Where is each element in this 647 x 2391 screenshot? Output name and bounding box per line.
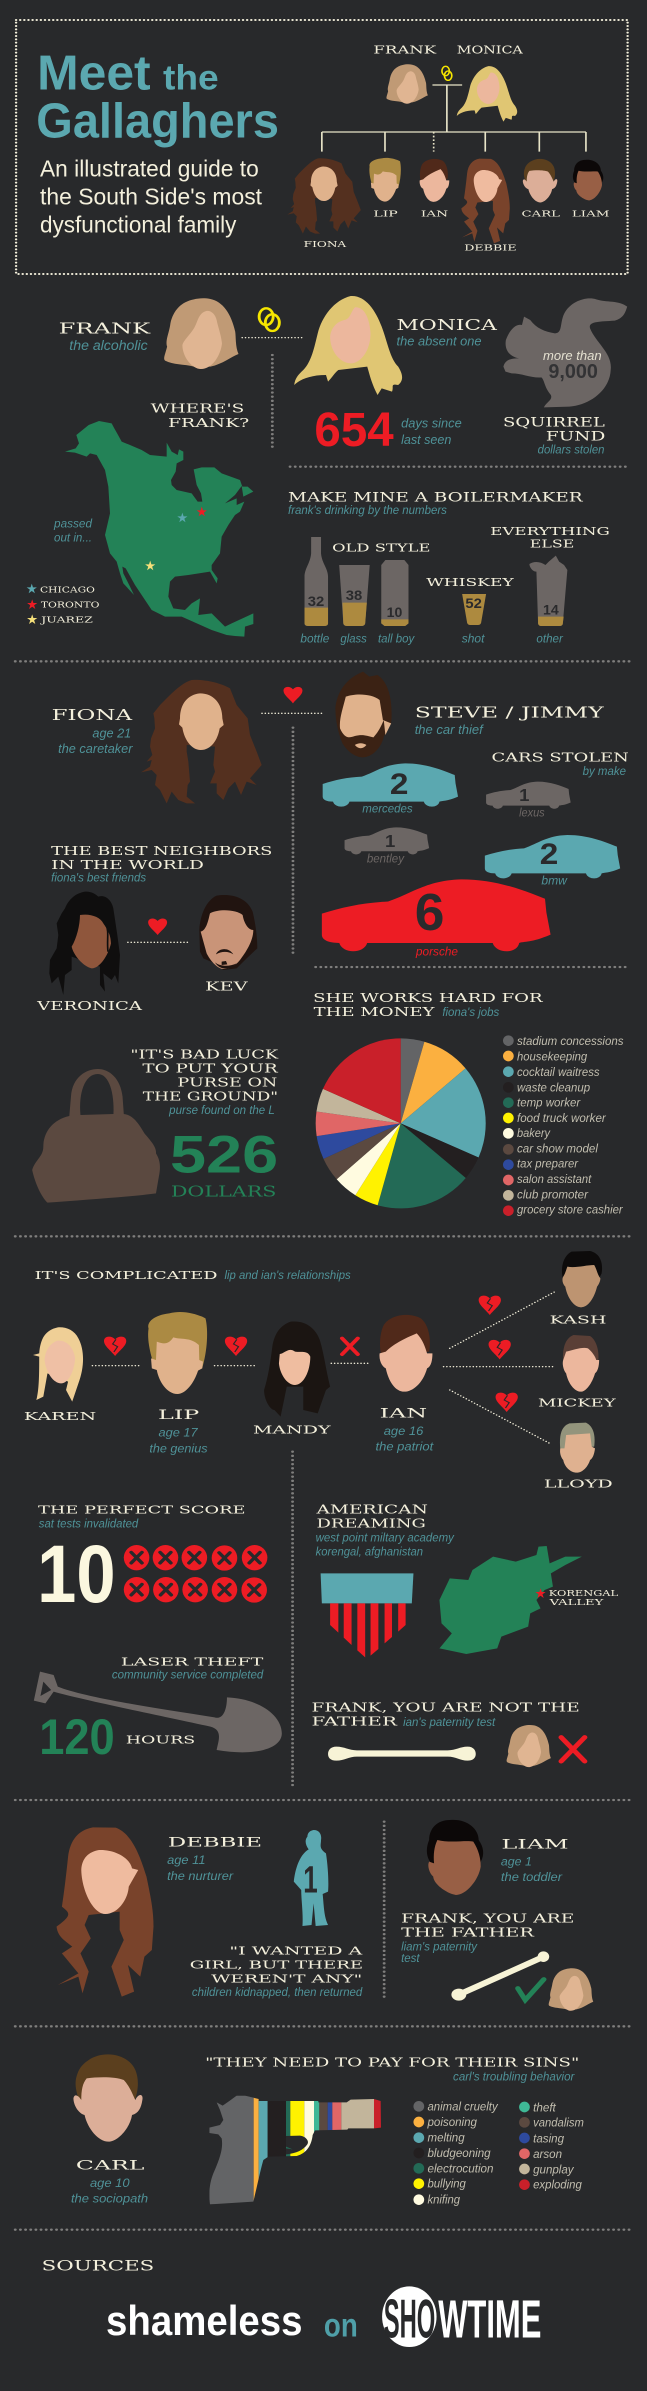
steve heading: the car thief xyxy=(415,722,484,738)
portrait: fiona xyxy=(141,680,262,803)
portrait: frank xyxy=(164,298,239,369)
heading: you are the father: liam's paternity xyxy=(401,1940,478,1953)
heading: boilermaker: frank's drinking by the numbers xyxy=(288,503,447,517)
icon: cocktail xyxy=(529,556,567,626)
heading: you are the father: THE FATHER xyxy=(401,1926,535,1940)
heading: the perfect score xyxy=(38,1504,246,1530)
quote: bad luck xyxy=(130,1048,279,1117)
chart: drinks by the numbers: glass xyxy=(340,632,367,645)
chart: drinks by the numbers: shot xyxy=(462,632,486,645)
pie legend: tax preparer xyxy=(517,1157,579,1170)
portrait: ian: the patriot xyxy=(375,1440,435,1453)
car: bentley: 1 xyxy=(385,832,395,851)
pie legend: food truck worker xyxy=(517,1111,606,1125)
icon: red x xyxy=(342,1338,358,1354)
portrait: lip: LIP xyxy=(158,1407,199,1423)
gun legend: melting xyxy=(427,2131,465,2144)
portrait: veronica xyxy=(36,892,142,1014)
icon: cocktail: 14 xyxy=(543,603,559,618)
icon: shot glass xyxy=(462,594,486,625)
portrait: lloyd xyxy=(544,1423,613,1491)
carl heading: the sociopath xyxy=(71,2192,148,2205)
quote: wanted a girl: "I WANTED A xyxy=(229,1945,363,1958)
family tree: FRANK xyxy=(373,44,437,56)
panel: header xyxy=(16,20,628,274)
car: porsche: porsche xyxy=(415,945,458,958)
icon: shield xyxy=(321,1573,413,1657)
stat: 10 invalidated tests xyxy=(37,1529,267,1620)
logo: shameless on showtime: shameless xyxy=(106,2298,302,2344)
gun legend: electrocution xyxy=(427,2162,494,2175)
heading: where's frank: FRANK? xyxy=(168,416,249,431)
heading: it's complicated xyxy=(35,1268,351,1283)
stat: 120 hours xyxy=(39,1709,195,1765)
monica heading xyxy=(397,317,498,349)
portrait: karen: KAREN xyxy=(24,1410,96,1424)
logo: shameless on showtime: SHO xyxy=(384,2289,435,2350)
pie legend xyxy=(503,1034,624,1216)
heading: you are the father: FRANK, YOU ARE xyxy=(401,1912,574,1926)
chart: drinks by the numbers: EVERYTHING xyxy=(490,525,610,539)
heading: american dreaming: AMERICAN xyxy=(315,1503,428,1517)
quote: bad luck: THE GROUND" xyxy=(143,1090,278,1104)
icon: broken heart xyxy=(104,1337,126,1356)
icon: red x xyxy=(561,1737,585,1761)
logo: shameless on showtime xyxy=(106,2286,541,2350)
icon: tall boy can xyxy=(381,560,409,626)
heading: laser theft xyxy=(112,1656,264,1681)
map caption: passed xyxy=(53,517,92,530)
icon: green check xyxy=(518,1979,544,2000)
liam heading xyxy=(501,1836,569,1884)
title: the xyxy=(163,58,219,97)
portrait: karen xyxy=(24,1327,96,1424)
map caption: out in... xyxy=(54,531,92,544)
car: lexus: 1 xyxy=(519,786,529,805)
pie chart: fiona's jobs xyxy=(316,1038,486,1208)
car: bentley: bentley xyxy=(367,852,405,865)
quote: pay for their sins: carl's troubling behavior xyxy=(453,2070,575,2083)
heading: you are the father: test xyxy=(401,1951,421,1965)
steve heading: STEVE / JIMMY xyxy=(415,704,605,721)
squirrel fund: SQUIRREL xyxy=(503,416,606,430)
icon: shot glass: 52 xyxy=(465,596,482,612)
heading: you are the father xyxy=(401,1912,574,1965)
heading: not the father: FRANK, YOU ARE NOT THE xyxy=(312,1701,580,1715)
car: lexus xyxy=(486,782,571,819)
carl heading: age 10 xyxy=(90,2176,130,2190)
monica heading: MONICA xyxy=(397,317,498,334)
debbie heading: the nurturer xyxy=(167,1869,234,1883)
gun legend: theft xyxy=(533,2101,557,2114)
family tree: CARL xyxy=(522,210,561,219)
heading: boilermaker: MAKE MINE A BOILERMAKER xyxy=(288,491,584,505)
family tree: LIAM xyxy=(572,210,609,219)
portrait: ian: age 16 xyxy=(384,1424,424,1438)
steve heading xyxy=(415,704,605,738)
portrait: mickey xyxy=(538,1335,616,1410)
pie legend: club promoter xyxy=(517,1188,589,1201)
heading: the perfect score: sat tests invalidated xyxy=(39,1517,139,1530)
squirrel fund: 9,000 xyxy=(548,360,598,382)
heading: american dreaming: west point miltary academy xyxy=(316,1531,455,1544)
portrait: liam xyxy=(427,1820,483,1895)
map: afghanistan xyxy=(439,1546,619,1654)
portrait: lip: the genius xyxy=(149,1442,208,1455)
subtitle xyxy=(40,155,263,238)
squirrel fund: more than xyxy=(543,349,602,364)
icon: glass xyxy=(339,565,370,626)
fiona heading: FIONA xyxy=(52,707,134,724)
icon: heart xyxy=(148,918,167,935)
heading: she works hard: SHE WORKS HARD FOR xyxy=(313,991,544,1006)
family tree: IAN xyxy=(421,210,449,219)
stat: 10 invalidated tests: 10 xyxy=(37,1529,116,1620)
icon: purse xyxy=(32,1069,160,1203)
car: mercedes: mercedes xyxy=(362,802,413,815)
map: afghanistan: VALLEY xyxy=(548,1598,604,1608)
heading: where's frank xyxy=(151,402,249,431)
portrait: lloyd: LLOYD xyxy=(544,1478,613,1491)
subtitle: dysfunctional family xyxy=(40,211,237,238)
quote: wanted a girl: WEREN'T ANY" xyxy=(211,1973,362,1986)
chart: drinks by the numbers: other xyxy=(536,632,563,645)
portrait: mickey: MICKEY xyxy=(538,1397,616,1410)
panel: debbie and liam xyxy=(15,1800,629,2026)
frank heading xyxy=(59,320,151,354)
icon: shovel xyxy=(34,1672,282,1752)
chart: gun of behaviors xyxy=(210,2096,381,2204)
stat: 120 hours: HOURS xyxy=(126,1734,195,1747)
portrait: kev: KEV xyxy=(205,980,248,994)
quote: wanted a girl: GIRL, BUT THERE xyxy=(190,1959,363,1972)
car: bmw: 2 xyxy=(540,837,558,870)
heading: cars stolen: CARS STOLEN xyxy=(491,751,629,765)
gun legend xyxy=(413,2100,584,2206)
quote: bad luck: purse found on the L xyxy=(168,1103,275,1117)
title: Gallaghers xyxy=(36,93,279,148)
quote: pay for their sins: "THEY NEED TO PAY FOR THEIR SINS" xyxy=(205,2056,579,2070)
pie legend: temp worker xyxy=(517,1096,581,1109)
portrait: steve xyxy=(335,672,392,757)
subtitle: the South Side's most xyxy=(40,183,263,210)
fiona heading: age 21 xyxy=(92,726,131,741)
pie legend: cocktail waitress xyxy=(517,1065,600,1079)
icon: tall boy can: 10 xyxy=(387,605,403,621)
panel: fiona and steve xyxy=(15,661,629,1014)
gun legend: animal cruelty xyxy=(427,2100,499,2113)
stat: 120 hours: 120 xyxy=(39,1709,115,1765)
heading: laser theft: community service completed xyxy=(112,1668,264,1681)
car: bmw xyxy=(485,835,620,887)
liam heading: LIAM xyxy=(501,1836,569,1852)
stat: 654 days: last seen xyxy=(401,432,451,448)
family tree xyxy=(287,44,609,253)
gun legend: gunplay xyxy=(533,2163,575,2176)
squirrel fund: FUND xyxy=(546,430,605,444)
panel: fiona's money xyxy=(15,991,629,1236)
debbie heading xyxy=(167,1836,262,1883)
icon: broken heart xyxy=(225,1337,247,1356)
car: porsche xyxy=(322,879,551,958)
squirrel fund: dollars stolen xyxy=(538,443,605,456)
gun legend: vandalism xyxy=(533,2116,584,2129)
fiona heading: the caretaker xyxy=(58,741,133,757)
icon: kidnapped child: 1 xyxy=(303,1859,318,1901)
heading: it's complicated: lip and ian's relationships xyxy=(224,1268,351,1282)
car: porsche: 6 xyxy=(415,884,444,942)
icon: frank head xyxy=(549,1968,593,2011)
gun legend: arson xyxy=(533,2147,562,2161)
heading: she works hard: fiona's jobs xyxy=(442,1005,500,1019)
portrait: lip xyxy=(148,1312,208,1455)
icon: cotton swab xyxy=(328,1747,476,1761)
stat: 654 days xyxy=(314,402,462,457)
portrait: monica xyxy=(294,296,402,395)
carl heading: CARL xyxy=(76,2157,144,2173)
quote: bad luck: PURSE ON xyxy=(177,1076,278,1090)
heading: cars stolen xyxy=(491,751,629,778)
car: mercedes xyxy=(323,763,458,815)
heading: cars stolen: by make xyxy=(583,764,626,778)
icon: wedding rings xyxy=(259,308,279,331)
gun legend: poisoning xyxy=(427,2115,478,2129)
car: lexus: lexus xyxy=(519,806,545,819)
portrait: veronica: VERONICA xyxy=(36,999,142,1014)
chart: cars by make xyxy=(322,763,620,958)
car: bentley xyxy=(345,827,429,865)
heading: american dreaming xyxy=(315,1503,455,1558)
connectors: ian's relationships xyxy=(444,1292,555,1444)
icon: cotton swab xyxy=(451,1951,549,2001)
icon: bottle xyxy=(305,537,328,626)
heading: she works hard xyxy=(313,991,544,1020)
dotted header frame xyxy=(16,20,628,274)
map legend: JUAREZ xyxy=(40,616,93,625)
icon: heart xyxy=(283,687,302,703)
frank heading: FRANK xyxy=(59,320,151,337)
chart: drinks by the numbers: ELSE xyxy=(530,538,574,551)
map legend xyxy=(27,584,99,625)
gun legend: knifing xyxy=(427,2193,461,2206)
liam heading: age 1 xyxy=(501,1855,532,1868)
panel: lip and ian stats xyxy=(34,1452,619,1787)
panel: frank and monica xyxy=(27,296,628,645)
heading: best neighbors: IN THE WORLD xyxy=(51,858,204,873)
heading: best neighbors: THE BEST NEIGHBORS xyxy=(51,844,272,859)
heading: laser theft: LASER THEFT xyxy=(121,1656,264,1669)
panel: carl xyxy=(15,2054,629,2350)
portrait: mandy xyxy=(253,1321,331,1437)
icon: frank head xyxy=(507,1725,551,1767)
pie legend: housekeeping xyxy=(517,1050,588,1063)
portrait: kash xyxy=(550,1251,607,1327)
icon: glass: 38 xyxy=(346,588,363,604)
family tree: MONICA xyxy=(457,44,524,56)
heading: she works hard: THE MONEY xyxy=(314,1005,436,1020)
stat: 654 days: 654 xyxy=(314,402,394,457)
quote: wanted a girl xyxy=(190,1945,363,1999)
family tree: FIONA xyxy=(304,240,347,250)
map: afghanistan: KORENGAL xyxy=(549,1589,619,1599)
chart: drinks by the numbers xyxy=(300,525,610,645)
gun legend: bullying xyxy=(427,2177,466,2190)
heading: american dreaming: DREAMING xyxy=(316,1517,426,1531)
panel: it's complicated xyxy=(24,1251,616,1491)
stat: 654 days: days since xyxy=(401,416,462,431)
gun legend: bludgeoning xyxy=(427,2146,491,2160)
debbie heading: DEBBIE xyxy=(168,1836,262,1850)
carl heading xyxy=(71,2157,148,2205)
portrait: debbie xyxy=(57,1827,153,1997)
map legend: CHICAGO xyxy=(40,586,95,595)
quote: wanted a girl: children kidnapped, then returned xyxy=(192,1985,363,1999)
portrait: mandy: MANDY xyxy=(253,1424,331,1437)
quote: bad luck: TO PUT YOUR xyxy=(142,1062,279,1076)
liam heading: the toddler xyxy=(501,1870,563,1884)
car: mercedes: 2 xyxy=(390,767,409,800)
heading: best neighbors xyxy=(51,844,272,884)
portrait: ian: IAN xyxy=(380,1405,427,1421)
subtitle: An illustrated guide to xyxy=(40,155,259,182)
heading: not the father: FATHER xyxy=(312,1715,398,1729)
gun legend: tasing xyxy=(533,2132,565,2145)
monica heading: the absent one xyxy=(397,334,482,349)
heading: where's frank: WHERE'S xyxy=(151,402,244,416)
chart: drinks by the numbers: bottle xyxy=(300,632,329,645)
fiona heading xyxy=(52,707,134,757)
portrait: lip: age 17 xyxy=(158,1426,198,1439)
stat: 526 dollars: DOLLARS xyxy=(171,1183,276,1200)
family tree: DEBBIE xyxy=(464,244,517,253)
heading: the perfect score: THE PERFECT SCORE xyxy=(38,1504,246,1517)
map: north america xyxy=(65,421,253,637)
pie legend: bakery xyxy=(517,1126,551,1140)
heading: it's complicated: IT'S COMPLICATED xyxy=(35,1269,217,1283)
heading: best neighbors: fiona's best friends xyxy=(51,871,146,884)
title: Meet xyxy=(37,45,151,100)
heading: not the father xyxy=(312,1701,580,1729)
gun legend: exploding xyxy=(533,2178,582,2191)
heading: boilermaker xyxy=(288,491,584,517)
title xyxy=(36,45,279,148)
portrait: kev xyxy=(199,895,257,994)
pie legend: stadium concessions xyxy=(517,1034,624,1048)
sources heading: SOURCES xyxy=(42,2257,154,2274)
chart: drinks by the numbers: WHISKEY xyxy=(426,576,514,590)
logo: shameless on showtime: on xyxy=(324,2306,358,2344)
portrait: kash: KASH xyxy=(550,1314,607,1327)
heading: not the father: ian's paternity test xyxy=(403,1715,496,1729)
quote: pay for their sins xyxy=(205,2056,579,2083)
stat: 526 dollars: 526 xyxy=(170,1124,278,1184)
debbie heading: age 11 xyxy=(167,1853,205,1867)
pie legend: salon assistant xyxy=(517,1172,592,1186)
squirrel fund xyxy=(503,298,627,456)
map caption xyxy=(53,517,92,544)
portrait: ian xyxy=(375,1315,435,1453)
chart: drinks by the numbers: tall boy xyxy=(378,632,415,645)
pie legend: waste cleanup xyxy=(517,1081,590,1094)
icon: kidnapped child xyxy=(294,1830,328,1926)
heading: american dreaming: korengal, afghanistan xyxy=(316,1545,423,1558)
car: bmw: bmw xyxy=(541,874,568,887)
pie legend: car show model xyxy=(517,1142,599,1155)
chart: drinks by the numbers: OLD STYLE xyxy=(332,542,430,555)
icon: bottle: 32 xyxy=(308,594,325,610)
frank heading: the alcoholic xyxy=(69,338,148,354)
map legend: TORONTO xyxy=(41,601,99,610)
quote: bad luck: "IT'S BAD LUCK xyxy=(130,1048,279,1062)
family tree: LIP xyxy=(373,210,398,219)
portrait: carl xyxy=(73,2054,143,2142)
